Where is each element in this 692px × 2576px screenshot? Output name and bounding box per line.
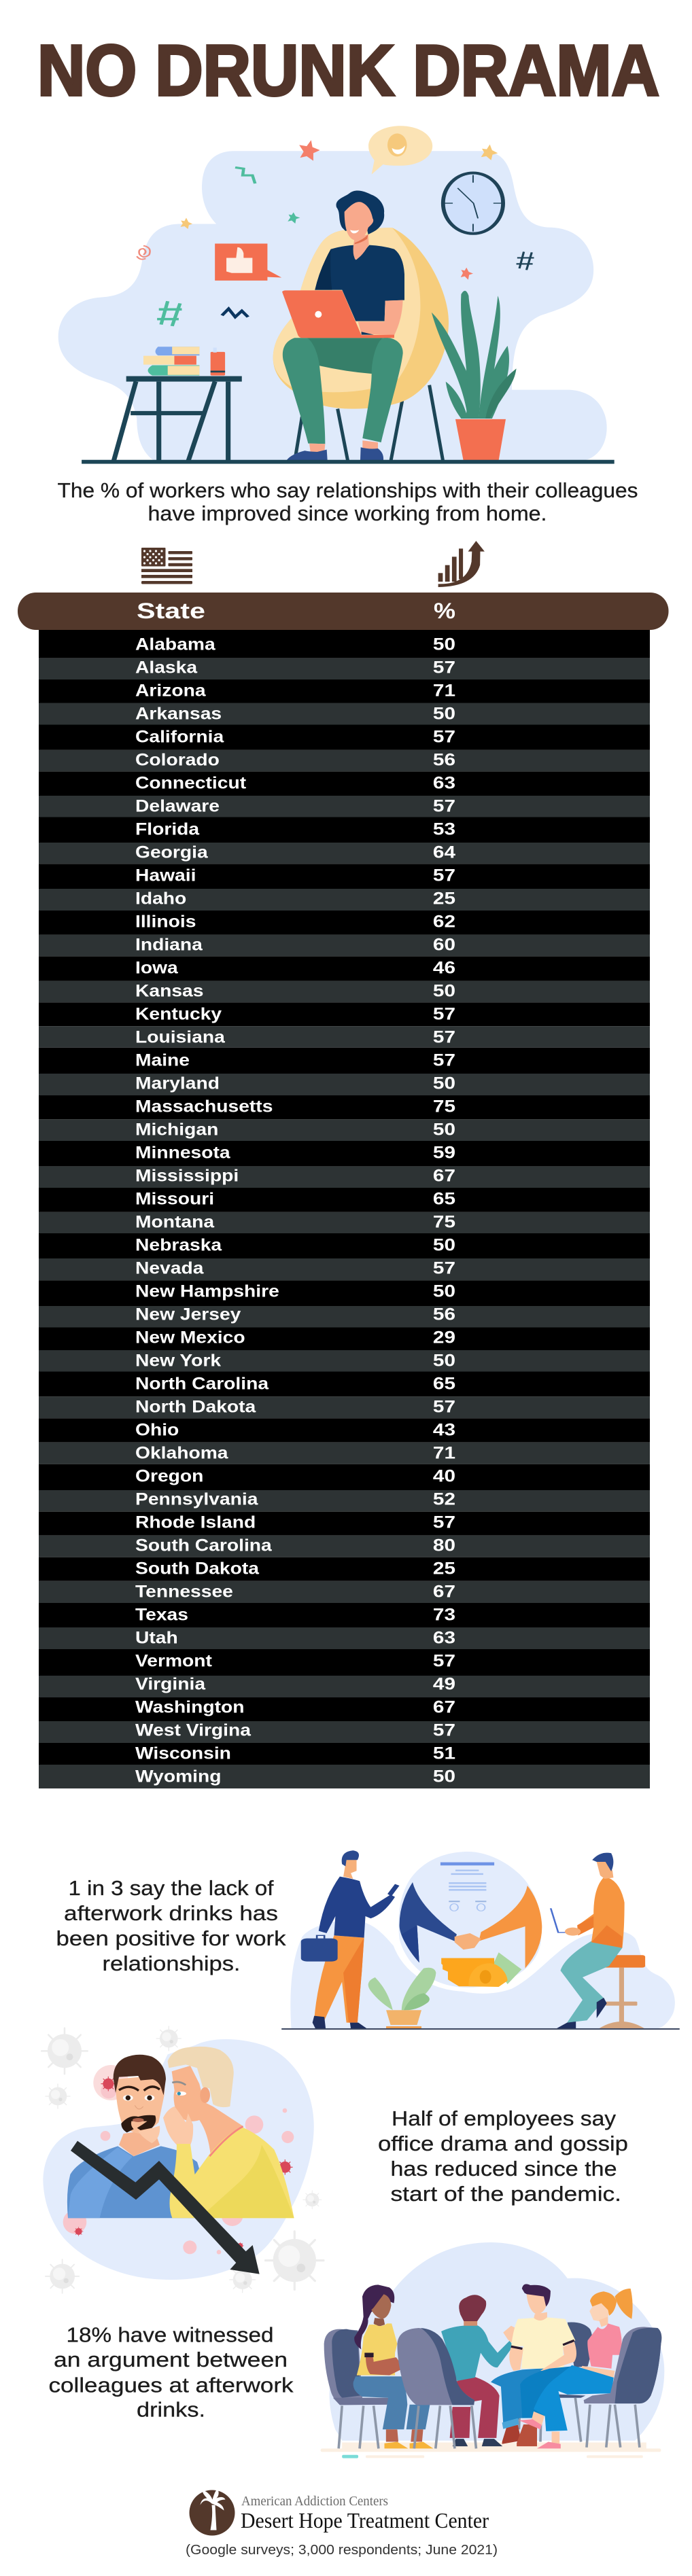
table header: %: [434, 599, 455, 623]
table header: [18, 593, 669, 630]
zigzag: [235, 167, 255, 183]
right man whispering: [163, 2047, 294, 2218]
plant pot: [455, 419, 506, 461]
row: Iowa: Iowa: [135, 958, 178, 977]
row: Wisconsin: 51: [433, 1744, 455, 1763]
row: Nevada: Nevada: [135, 1258, 204, 1277]
row: Tennessee: 67: [433, 1582, 455, 1601]
table: [114, 376, 242, 461]
row: Wisconsin: [39, 1743, 650, 1765]
company name: Desert Hope Treatment Center: [241, 2508, 489, 2533]
row: California: [39, 724, 650, 750]
row: Washington: Washington: [135, 1697, 244, 1716]
row: Arizona: [39, 680, 650, 703]
row: Wyoming: Wyoming: [135, 1767, 222, 1786]
row: Illinois: Illinois: [135, 912, 196, 931]
row: Missouri: [39, 1188, 650, 1212]
text: witnessed argument: 18% have witnessed: [67, 2323, 273, 2347]
row: Washington: 67: [433, 1697, 455, 1716]
ground line: [281, 2028, 680, 2030]
row: Pennsylvania: Pennsylvania: [135, 1489, 258, 1508]
row: Kentucky: [39, 1002, 650, 1026]
row: Oregon: [39, 1464, 650, 1490]
row: Missouri: 65: [433, 1189, 455, 1208]
row: Delaware: [39, 796, 650, 817]
row: Alabama: 50: [433, 635, 455, 654]
row: Iowa: [39, 957, 650, 981]
row: Texas: 73: [433, 1605, 455, 1624]
subheading: The % of workers who say relationships with their colleagues: [57, 478, 638, 502]
chair legs: [296, 385, 443, 461]
row: Maine: [39, 1048, 650, 1074]
row: Arizona: Arizona: [135, 681, 206, 700]
row: Missouri: Missouri: [135, 1189, 214, 1208]
text: afterwork drinks positive: 1 in 3 say the lack of: [68, 1876, 274, 1900]
row: Hawaii: Hawaii: [135, 866, 196, 885]
row: South Carolina: [39, 1536, 650, 1557]
row: Alabama: [39, 630, 650, 658]
face: [345, 202, 373, 244]
central oval with document: [398, 1852, 541, 1988]
potted plant: [368, 1968, 436, 2029]
subheading: have improved since working from home.: [148, 501, 547, 525]
row: Indiana: Indiana: [135, 935, 203, 954]
row: New Hampshire: New Hampshire: [135, 1282, 279, 1301]
row: Virginia: [39, 1674, 650, 1697]
text: witnessed argument: an argument between: [54, 2348, 288, 2371]
table header: State: [137, 599, 205, 623]
shirt: [315, 245, 404, 321]
row: Mississippi: Mississippi: [135, 1166, 239, 1185]
neck: [353, 234, 369, 260]
row: North Carolina: North Carolina: [135, 1374, 269, 1393]
row: Indiana: [39, 935, 650, 957]
row: South Carolina: South Carolina: [135, 1536, 272, 1555]
text: office drama reduced: Half of employees say: [392, 2106, 617, 2130]
row: West Virgina: West Virgina: [135, 1721, 251, 1740]
row: Georgia: 64: [433, 843, 456, 862]
squiggle: [222, 308, 248, 317]
row: New Hampshire: 50: [433, 1282, 455, 1301]
row: California: California: [135, 727, 224, 746]
row: Wyoming: [39, 1765, 650, 1788]
row: South Carolina: 80: [433, 1536, 455, 1555]
row: New York: 50: [433, 1351, 455, 1370]
row: Michigan: [39, 1119, 650, 1141]
plant and floor: [82, 291, 615, 464]
row: Vermont: 57: [433, 1651, 455, 1670]
man with laptop in egg chair: [273, 191, 449, 461]
row: California: 57: [433, 727, 455, 746]
illustration: background and props behind the man: [58, 126, 607, 461]
illustration: colleagues gossiping with down arrow: [41, 2026, 324, 2293]
centre chair: [397, 2328, 476, 2448]
thumbs up sign: [215, 243, 281, 281]
row: Mississippi: 67: [433, 1166, 455, 1185]
row: North Dakota: [39, 1396, 650, 1418]
row: Kansas: 50: [433, 981, 455, 1000]
row: Maryland: Maryland: [135, 1074, 220, 1093]
floor line: [82, 460, 615, 464]
row: Delaware: 57: [433, 796, 455, 815]
row: Alabama: Alabama: [135, 635, 215, 654]
row: Oklahoma: Oklahoma: [135, 1443, 228, 1462]
text: afterwork drinks positive: been positive for work: [56, 1926, 286, 1950]
feet: [287, 440, 383, 460]
row: North Carolina: 65: [433, 1374, 455, 1393]
row: Rhode Island: 57: [433, 1513, 455, 1532]
row: Colorado: [39, 750, 650, 772]
row: Virginia: Virginia: [135, 1674, 205, 1693]
row: Delaware: Delaware: [135, 796, 220, 815]
row: New Jersey: 56: [433, 1305, 455, 1324]
trousers: [283, 338, 403, 444]
text: office drama reduced: office drama and gossip: [378, 2132, 628, 2155]
row: Illinois: [39, 911, 650, 935]
text: office drama reduced: [378, 2106, 628, 2206]
row: West Virgina: [39, 1721, 650, 1743]
row: Connecticut: [39, 772, 650, 796]
row: Indiana: 60: [433, 935, 455, 954]
left chair: [324, 2329, 390, 2448]
icon: american flag: [141, 548, 192, 584]
row: Arkansas: [39, 703, 650, 724]
row: Georgia: Georgia: [135, 843, 208, 862]
row: Montana: [39, 1212, 650, 1233]
row: Massachusetts: 75: [433, 1097, 455, 1116]
row: Pennsylvania: [39, 1489, 650, 1512]
row: South Dakota: [39, 1557, 650, 1581]
blob: [330, 2242, 664, 2441]
left man listening: [67, 2055, 209, 2218]
row: Idaho: [39, 889, 650, 911]
row: South Dakota: 25: [433, 1559, 455, 1578]
row: New Jersey: [39, 1305, 650, 1328]
down arrow: [71, 2141, 260, 2274]
row: Connecticut: Connecticut: [135, 773, 246, 792]
text: witnessed argument: [49, 2323, 294, 2422]
man in cream shirt: [491, 2284, 576, 2446]
row: Alaska: 57: [433, 658, 455, 677]
row: Tennessee: [39, 1581, 650, 1603]
right chair: [584, 2327, 661, 2448]
row: Maryland: 50: [433, 1074, 455, 1093]
pink spots: [63, 2065, 294, 2255]
row: South Dakota: South Dakota: [135, 1559, 259, 1578]
row: Washington: [39, 1697, 650, 1721]
row: Pennsylvania: 52: [433, 1489, 455, 1508]
can: [211, 348, 225, 376]
row: Louisiana: Louisiana: [135, 1027, 225, 1046]
row: Maine: Maine: [135, 1051, 190, 1070]
row: Iowa: 46: [433, 958, 455, 977]
row: Michigan: 50: [433, 1120, 455, 1139]
row: North Dakota: 57: [433, 1397, 455, 1416]
left businessman: [301, 1850, 400, 2029]
blob: [43, 2039, 314, 2280]
company parent name: American Addiction Centers: [241, 2494, 388, 2509]
row: New York: [39, 1350, 650, 1371]
row: Nebraska: Nebraska: [135, 1235, 222, 1254]
row: Michigan: Michigan: [135, 1120, 218, 1139]
row: North Dakota: North Dakota: [135, 1397, 256, 1416]
row: New Mexico: [39, 1328, 650, 1350]
row: Mississippi: [39, 1166, 650, 1188]
clock: [443, 173, 503, 234]
red viruses: [74, 2077, 293, 2249]
row: Utah: [39, 1627, 650, 1649]
row: Connecticut: 63: [433, 773, 455, 792]
row: Oklahoma: [39, 1443, 650, 1464]
row: Oklahoma: 71: [433, 1443, 455, 1462]
row: Kentucky: Kentucky: [135, 1004, 222, 1023]
forearm: [358, 300, 403, 335]
egg chair: [273, 228, 449, 409]
hair: [336, 191, 384, 234]
row: Montana: Montana: [135, 1212, 214, 1231]
text: afterwork drinks positive: relationships.: [102, 1952, 241, 1975]
row: Minnesota: Minnesota: [135, 1143, 230, 1162]
row: Maine: 57: [433, 1051, 455, 1070]
row: West Virgina: 57: [433, 1721, 455, 1740]
row: New Mexico: 29: [433, 1328, 455, 1347]
hash navy: [517, 252, 534, 270]
laptop: [282, 290, 394, 338]
row: Vermont: Vermont: [135, 1651, 212, 1670]
row: Ohio: Ohio: [135, 1420, 179, 1439]
background blob: [58, 151, 607, 461]
row: Ohio: 43: [433, 1420, 455, 1439]
row: Oregon: 40: [433, 1466, 455, 1485]
coins and bills: [441, 1952, 521, 1987]
palm tree badge: [189, 2488, 235, 2536]
illustration: business handshake: [281, 1850, 680, 2030]
man from behind in teal: [441, 2295, 518, 2446]
row: Arkansas: Arkansas: [135, 704, 222, 723]
row: Texas: [39, 1603, 650, 1627]
row: Rhode Island: Rhode Island: [135, 1513, 256, 1532]
row: Arizona: 71: [433, 681, 455, 700]
text: witnessed argument: drinks.: [137, 2397, 205, 2422]
row: Montana: 75: [433, 1212, 455, 1231]
stars: [181, 140, 498, 280]
row: Virginia: 49: [433, 1674, 455, 1693]
row: Texas: Texas: [135, 1605, 188, 1624]
hash green: [157, 301, 181, 326]
row: Idaho: 25: [433, 889, 455, 908]
row: Massachusetts: Massachusetts: [135, 1097, 273, 1116]
row: Wyoming: 50: [433, 1767, 455, 1786]
row: Nevada: 57: [433, 1258, 455, 1277]
row: North Carolina: [39, 1371, 650, 1396]
woman in yellow shirt: [353, 2284, 433, 2448]
row: Alaska: [39, 658, 650, 680]
row: New York: New York: [135, 1351, 221, 1370]
text: witnessed argument: colleagues at afterwork: [49, 2373, 294, 2397]
row: Colorado: Colorado: [135, 750, 220, 769]
row: Oregon: Oregon: [135, 1466, 203, 1485]
row: Massachusetts: [39, 1095, 650, 1119]
row: Florida: [39, 817, 650, 843]
row: Hawaii: 57: [433, 866, 455, 885]
swirl: [137, 246, 150, 260]
viruses grey: [41, 2026, 324, 2293]
plant leaves: [432, 291, 517, 419]
row: Rhode Island: [39, 1512, 650, 1536]
row: Vermont: [39, 1649, 650, 1676]
floor: [321, 2442, 661, 2458]
row: Minnesota: 59: [433, 1143, 455, 1162]
row: Nebraska: [39, 1233, 650, 1258]
row: Georgia: [39, 843, 650, 864]
text: office drama reduced: start of the pandemic.: [390, 2182, 621, 2206]
row: Louisiana: [39, 1026, 650, 1048]
row: Kentucky: 57: [433, 1004, 455, 1023]
row: Utah: Utah: [135, 1628, 178, 1647]
row: Nebraska: 50: [433, 1235, 455, 1254]
row: Maryland: [39, 1074, 650, 1095]
illustration: group of colleagues seated: [321, 2242, 664, 2458]
row: Hawaii: [39, 864, 650, 889]
row: Idaho: Idaho: [135, 889, 186, 908]
logo: Desert Hope Treatment Center: [189, 2488, 489, 2536]
text: afterwork drinks positive: [56, 1876, 286, 1975]
row: Arkansas: 50: [433, 704, 455, 723]
row: Utah: 63: [433, 1628, 455, 1647]
row: New Jersey: New Jersey: [135, 1305, 241, 1324]
row: Florida: 53: [433, 819, 455, 839]
books: [143, 347, 199, 376]
row: Nevada: [39, 1258, 650, 1280]
row: Kansas: Kansas: [135, 981, 203, 1000]
row: Illinois: 62: [433, 912, 455, 931]
row: Tennessee: Tennessee: [135, 1582, 233, 1601]
source note: (Google surveys; 3,000 respondents; June 2021): [186, 2543, 498, 2558]
row: Ohio: [39, 1418, 650, 1443]
row: Alaska: Alaska: [135, 658, 197, 677]
back chair: [513, 2323, 592, 2441]
text: afterwork drinks positive: afterwork drinks has: [64, 1901, 278, 1925]
blob background: [290, 1920, 675, 2028]
right man on stool: [551, 1853, 645, 2029]
handshake: [400, 1882, 542, 1969]
row: Louisiana: 57: [433, 1027, 455, 1046]
table: [18, 593, 669, 1788]
text: office drama reduced: has reduced since the: [390, 2157, 617, 2181]
woman with ponytail: [519, 2289, 633, 2448]
speech bubble: [368, 126, 432, 175]
icon: growth chart with arrow: [438, 541, 485, 587]
row: New Mexico: New Mexico: [135, 1328, 245, 1347]
subheading: [57, 478, 638, 525]
row: Wisconsin: Wisconsin: [135, 1744, 231, 1763]
row: Minnesota: [39, 1141, 650, 1166]
row: New Hampshire: [39, 1280, 650, 1306]
row: Kansas: [39, 981, 650, 1002]
row: Florida: Florida: [135, 819, 199, 839]
row: Colorado: 56: [433, 750, 455, 769]
